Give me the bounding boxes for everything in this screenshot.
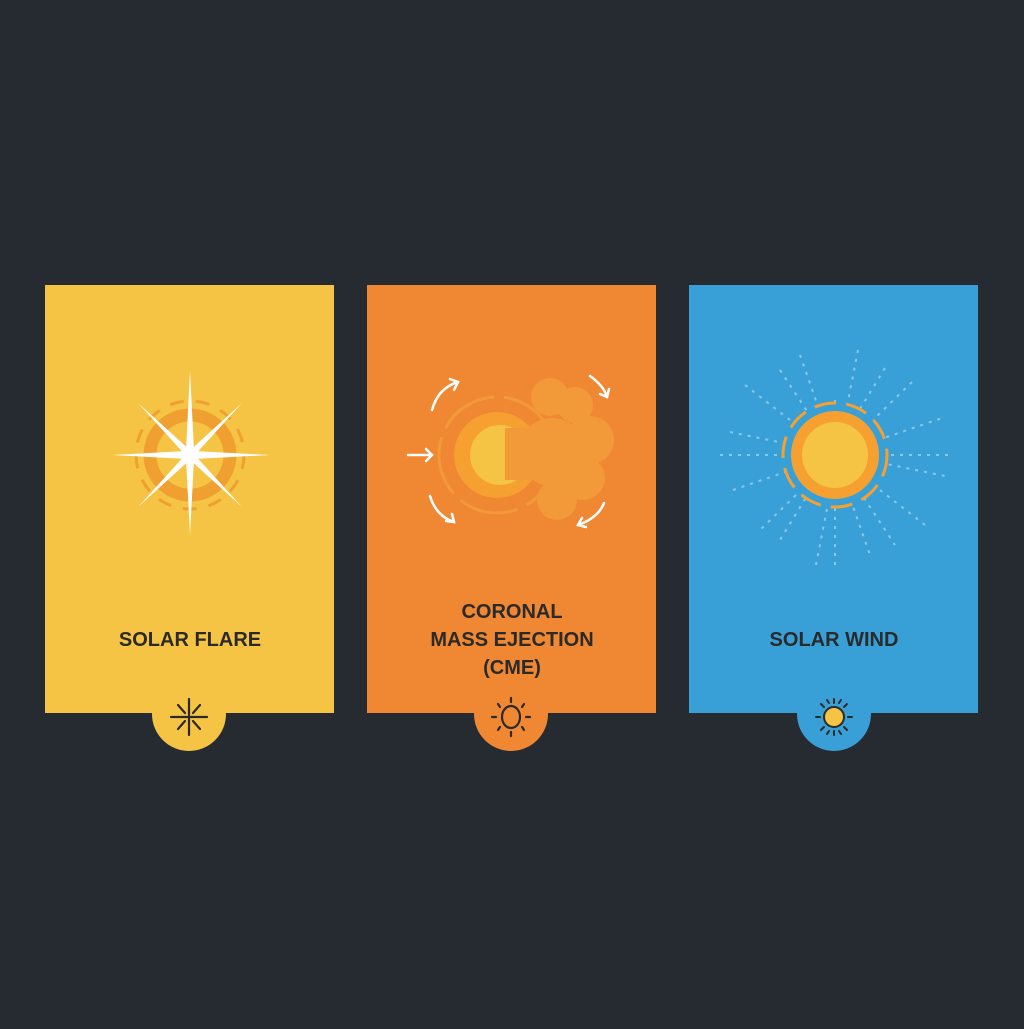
icon: solar wind sun <box>720 350 950 570</box>
panel: CME <box>367 285 656 751</box>
label: solar wind: SOLAR WIND <box>770 629 898 651</box>
icon: burst tab <box>171 699 207 735</box>
panel: solar wind <box>689 285 978 751</box>
icon: CME sun and cloud <box>408 376 614 527</box>
icon: flare burst <box>112 370 270 535</box>
panel: solar flare <box>45 285 334 751</box>
label: solar flare: SOLAR FLARE <box>119 629 261 651</box>
icon: sun outline tab <box>492 698 530 736</box>
label: CME: (CME) <box>483 657 541 679</box>
label: CME: CORONAL <box>461 601 563 623</box>
label: CME: MASS EJECTION <box>430 629 594 651</box>
icon: filled sun tab <box>816 699 852 735</box>
